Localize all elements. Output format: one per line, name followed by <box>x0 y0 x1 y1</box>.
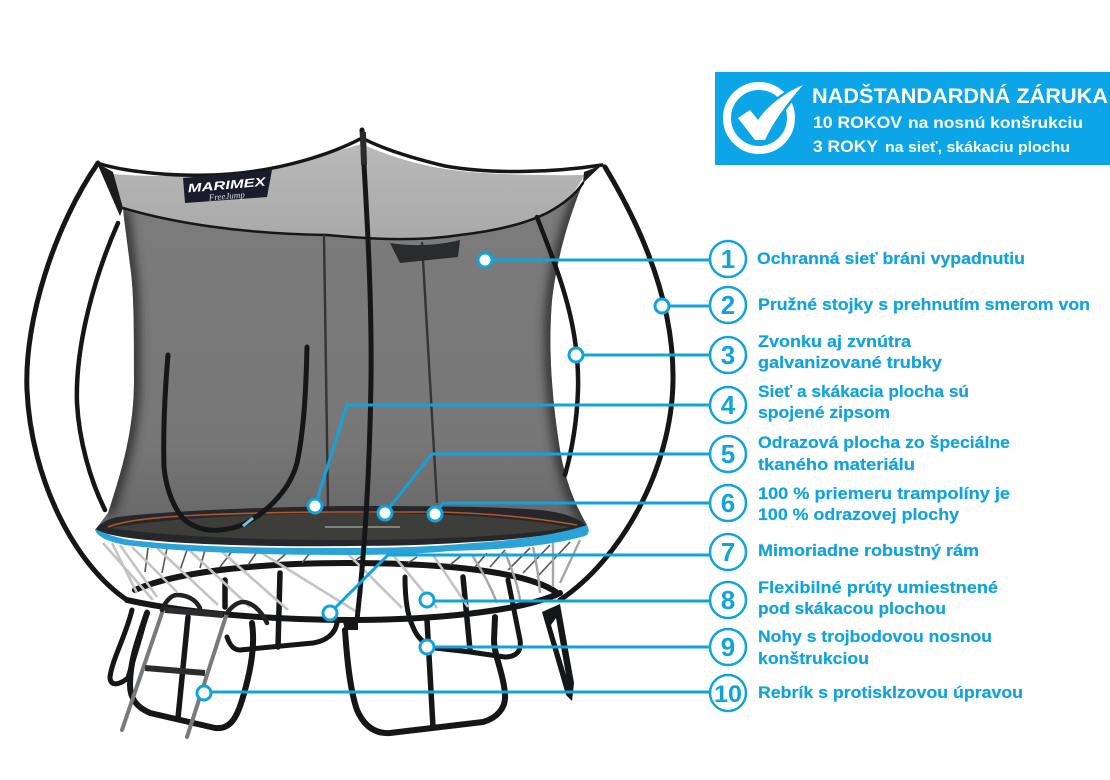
warranty heading: NADŠTANDARDNÁ ZÁRUKA <box>812 84 1108 108</box>
callout 2 <box>655 287 1090 323</box>
callout 7: 7 <box>721 537 735 567</box>
callout 4: 4 <box>721 390 736 420</box>
warranty panel <box>715 72 1110 165</box>
warranty line 2: na sieť, skákaciu plochu <box>885 139 1070 156</box>
callout 9 <box>420 627 992 668</box>
callout 9: konštrukciou <box>758 649 869 668</box>
warranty line 2 <box>813 137 1070 156</box>
callout 8 <box>420 578 998 618</box>
callout 3: galvanizované trubky <box>758 353 943 372</box>
callout 5: tkaného materiálu <box>758 455 915 474</box>
callout 8: Flexibilné prúty umiestnené <box>758 578 998 597</box>
brand label: MARIMEX <box>187 175 267 195</box>
back frame ring and legs <box>110 563 574 701</box>
brand label: FreeJump <box>207 189 246 203</box>
callout 1: Ochranná sieť bráni vypadnutiu <box>757 249 1025 268</box>
brand label <box>183 170 272 203</box>
net dark edges <box>108 183 587 525</box>
main net <box>95 183 587 530</box>
callout 4: spojené zipsom <box>758 403 890 422</box>
callout 8: pod skákacou plochou <box>758 599 946 618</box>
trampoline illustration <box>27 130 673 737</box>
front frame ring <box>127 593 560 620</box>
blue mat trim <box>95 525 589 555</box>
warranty line 1 <box>813 113 1083 132</box>
callout 3: Zvonku aj zvnútra <box>758 332 912 351</box>
upper net band <box>113 144 584 239</box>
callout 4 <box>308 382 969 513</box>
callout 10 <box>197 675 1023 711</box>
callout 5: Odrazová plocha zo špeciálne <box>758 433 1010 452</box>
warranty line 2: 3 ROKY <box>813 137 879 156</box>
net pocket <box>390 240 460 263</box>
callout 9: 9 <box>721 632 735 662</box>
callout 6: 100 % priemeru trampolíny je <box>758 484 1010 503</box>
ladder <box>122 595 267 737</box>
callout 6: 6 <box>721 488 735 518</box>
callout 1 <box>478 241 1025 277</box>
jump mat <box>95 506 587 546</box>
safety net <box>95 138 602 530</box>
callout 10: 10 <box>714 681 742 708</box>
callout 5: 5 <box>721 439 735 469</box>
callout 2: Pružné stojky s prehnutím smerom von <box>758 295 1090 314</box>
curved poles <box>27 130 673 620</box>
callout 5 <box>378 433 1010 520</box>
door zipper <box>164 347 307 530</box>
callout 10: Rebrík s protisklzovou úpravou <box>758 683 1023 702</box>
callout 7: Mimoriadne robustný rám <box>758 541 979 560</box>
callout 7 <box>323 534 979 620</box>
front legs <box>130 613 505 733</box>
callout 6 <box>428 484 1010 524</box>
callout 9: Nohy s trojbodovou nosnou <box>758 627 992 646</box>
callout 4: Sieť a skákacia plocha sú <box>758 382 969 401</box>
callout 3 <box>569 332 943 373</box>
callout 6: 100 % odrazovej plochy <box>758 505 960 524</box>
callout 8: 8 <box>721 585 735 615</box>
callout 1: 1 <box>721 244 735 274</box>
icon: check mark in circle <box>727 85 803 150</box>
warranty line 1: na nosnú konšrukciu <box>908 115 1083 132</box>
warranty line 1: 10 ROKOV <box>813 113 903 132</box>
springs <box>103 540 580 612</box>
callout 3: 3 <box>721 340 735 370</box>
callout 2: 2 <box>721 290 735 320</box>
